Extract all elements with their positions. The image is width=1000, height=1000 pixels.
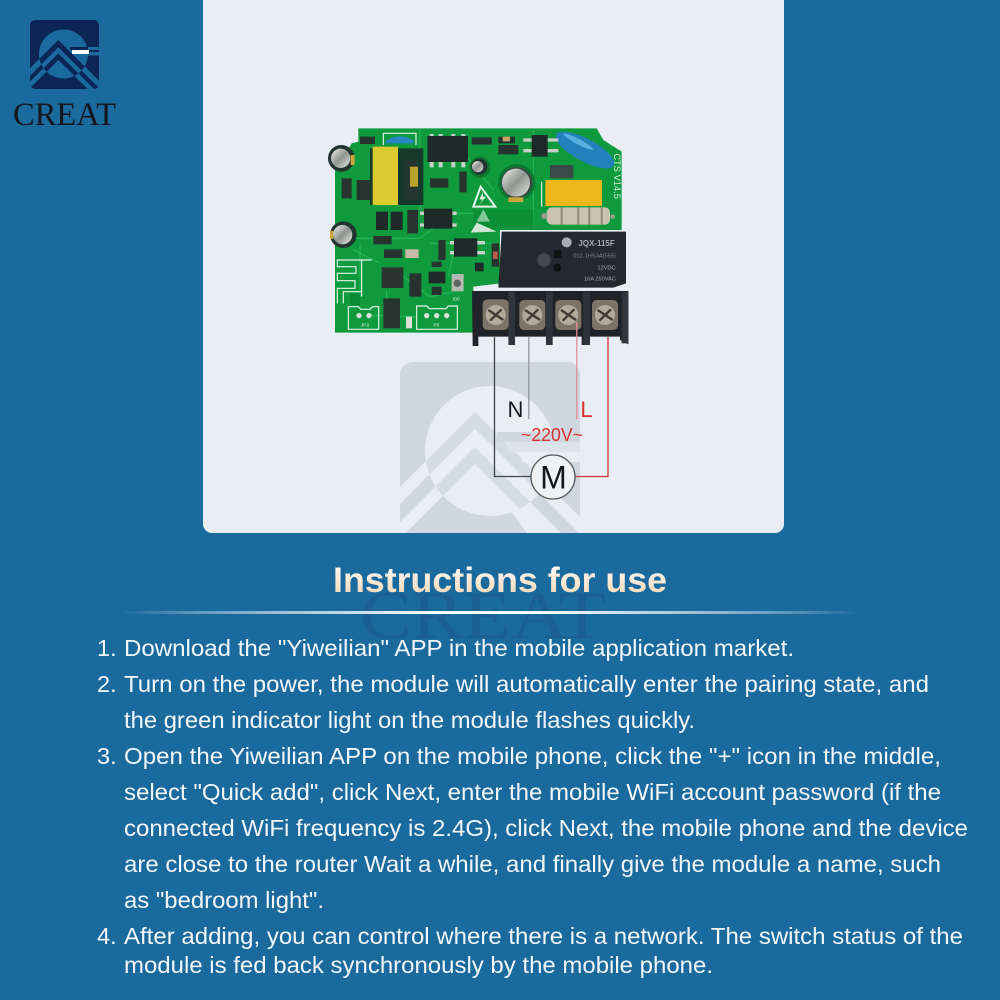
wiring diagram: M bbox=[540, 460, 567, 496]
title: Instructions for use bbox=[333, 561, 667, 600]
small components bbox=[342, 137, 518, 328]
relay: 12VDC bbox=[597, 265, 616, 271]
step 3 bbox=[97, 743, 968, 913]
step 4: After adding, you can control where there is a network. The switch status of the bbox=[124, 923, 963, 949]
wiring diagram bbox=[494, 322, 608, 499]
step 3: Open the Yiweilian APP on the mobile phone, click the "+" icon in the middle, bbox=[124, 743, 941, 769]
header pins bbox=[356, 297, 460, 329]
motor symbol bbox=[531, 455, 575, 499]
relay bbox=[498, 232, 626, 288]
live label: L bbox=[580, 397, 593, 422]
logo wordmark: CREAT bbox=[13, 97, 116, 133]
ground copper shading bbox=[473, 210, 533, 233]
PCB board bbox=[335, 128, 622, 333]
step 2 bbox=[97, 671, 929, 733]
step 3: connected WiFi frequency is 2.4G), click Next, the mobile phone and the device bbox=[124, 815, 968, 841]
step 3: select "Quick add", click Next, enter the mobile WiFi account password (if the bbox=[124, 779, 941, 805]
step 2: the green indicator light on the module flashes quickly. bbox=[124, 707, 695, 733]
title divider bbox=[120, 611, 860, 614]
black chips bbox=[376, 134, 573, 288]
panel: product photo bbox=[203, 0, 784, 533]
logo: CREAT bbox=[13, 20, 116, 133]
watermark logo bbox=[400, 362, 580, 533]
yellow capacitor bbox=[545, 180, 602, 206]
ceramic resistor bbox=[541, 207, 615, 225]
antenna area bbox=[350, 293, 360, 305]
step 3: 3. bbox=[97, 743, 117, 769]
terminal block bbox=[472, 291, 628, 346]
circuit board photo bbox=[328, 125, 628, 346]
hazard triangles bbox=[471, 187, 497, 233]
step 4 bbox=[97, 923, 963, 978]
board version label: CTS V14.5 bbox=[612, 153, 622, 199]
transformer bbox=[370, 147, 423, 205]
blue capacitors bbox=[385, 125, 619, 175]
relay: 012-1HS3A(555) bbox=[573, 253, 616, 259]
step 1: 1. bbox=[97, 635, 117, 661]
step 3: are close to the router Wait a while, and finally give the module a name, such bbox=[124, 851, 941, 877]
header pins: I00 bbox=[453, 297, 460, 303]
header pins: P5 bbox=[433, 323, 440, 329]
silkscreen markings bbox=[337, 133, 542, 329]
step 2: Turn on the power, the module will automatically enter the pairing state, and bbox=[124, 671, 929, 697]
relay: JQX-115F bbox=[578, 239, 615, 248]
watermark wordmark: CREAT bbox=[360, 577, 606, 653]
step 3: as "bedroom light". bbox=[124, 887, 324, 913]
instructions list bbox=[97, 635, 968, 978]
relay: 16A 250VAC bbox=[584, 276, 616, 282]
step 4: 4. bbox=[97, 923, 117, 949]
traces bbox=[335, 130, 533, 317]
voltage label: ~220V~ bbox=[521, 425, 583, 445]
electrolytic capacitors bbox=[328, 145, 535, 248]
header pins: JP2 bbox=[361, 323, 369, 329]
step 1: Download the "Yiweilian" APP in the mobile application market. bbox=[124, 635, 794, 661]
step 4: module is fed back synchronously by the mobile phone. bbox=[124, 952, 713, 978]
step 2: 2. bbox=[97, 671, 117, 697]
neutral label: N bbox=[508, 397, 523, 422]
